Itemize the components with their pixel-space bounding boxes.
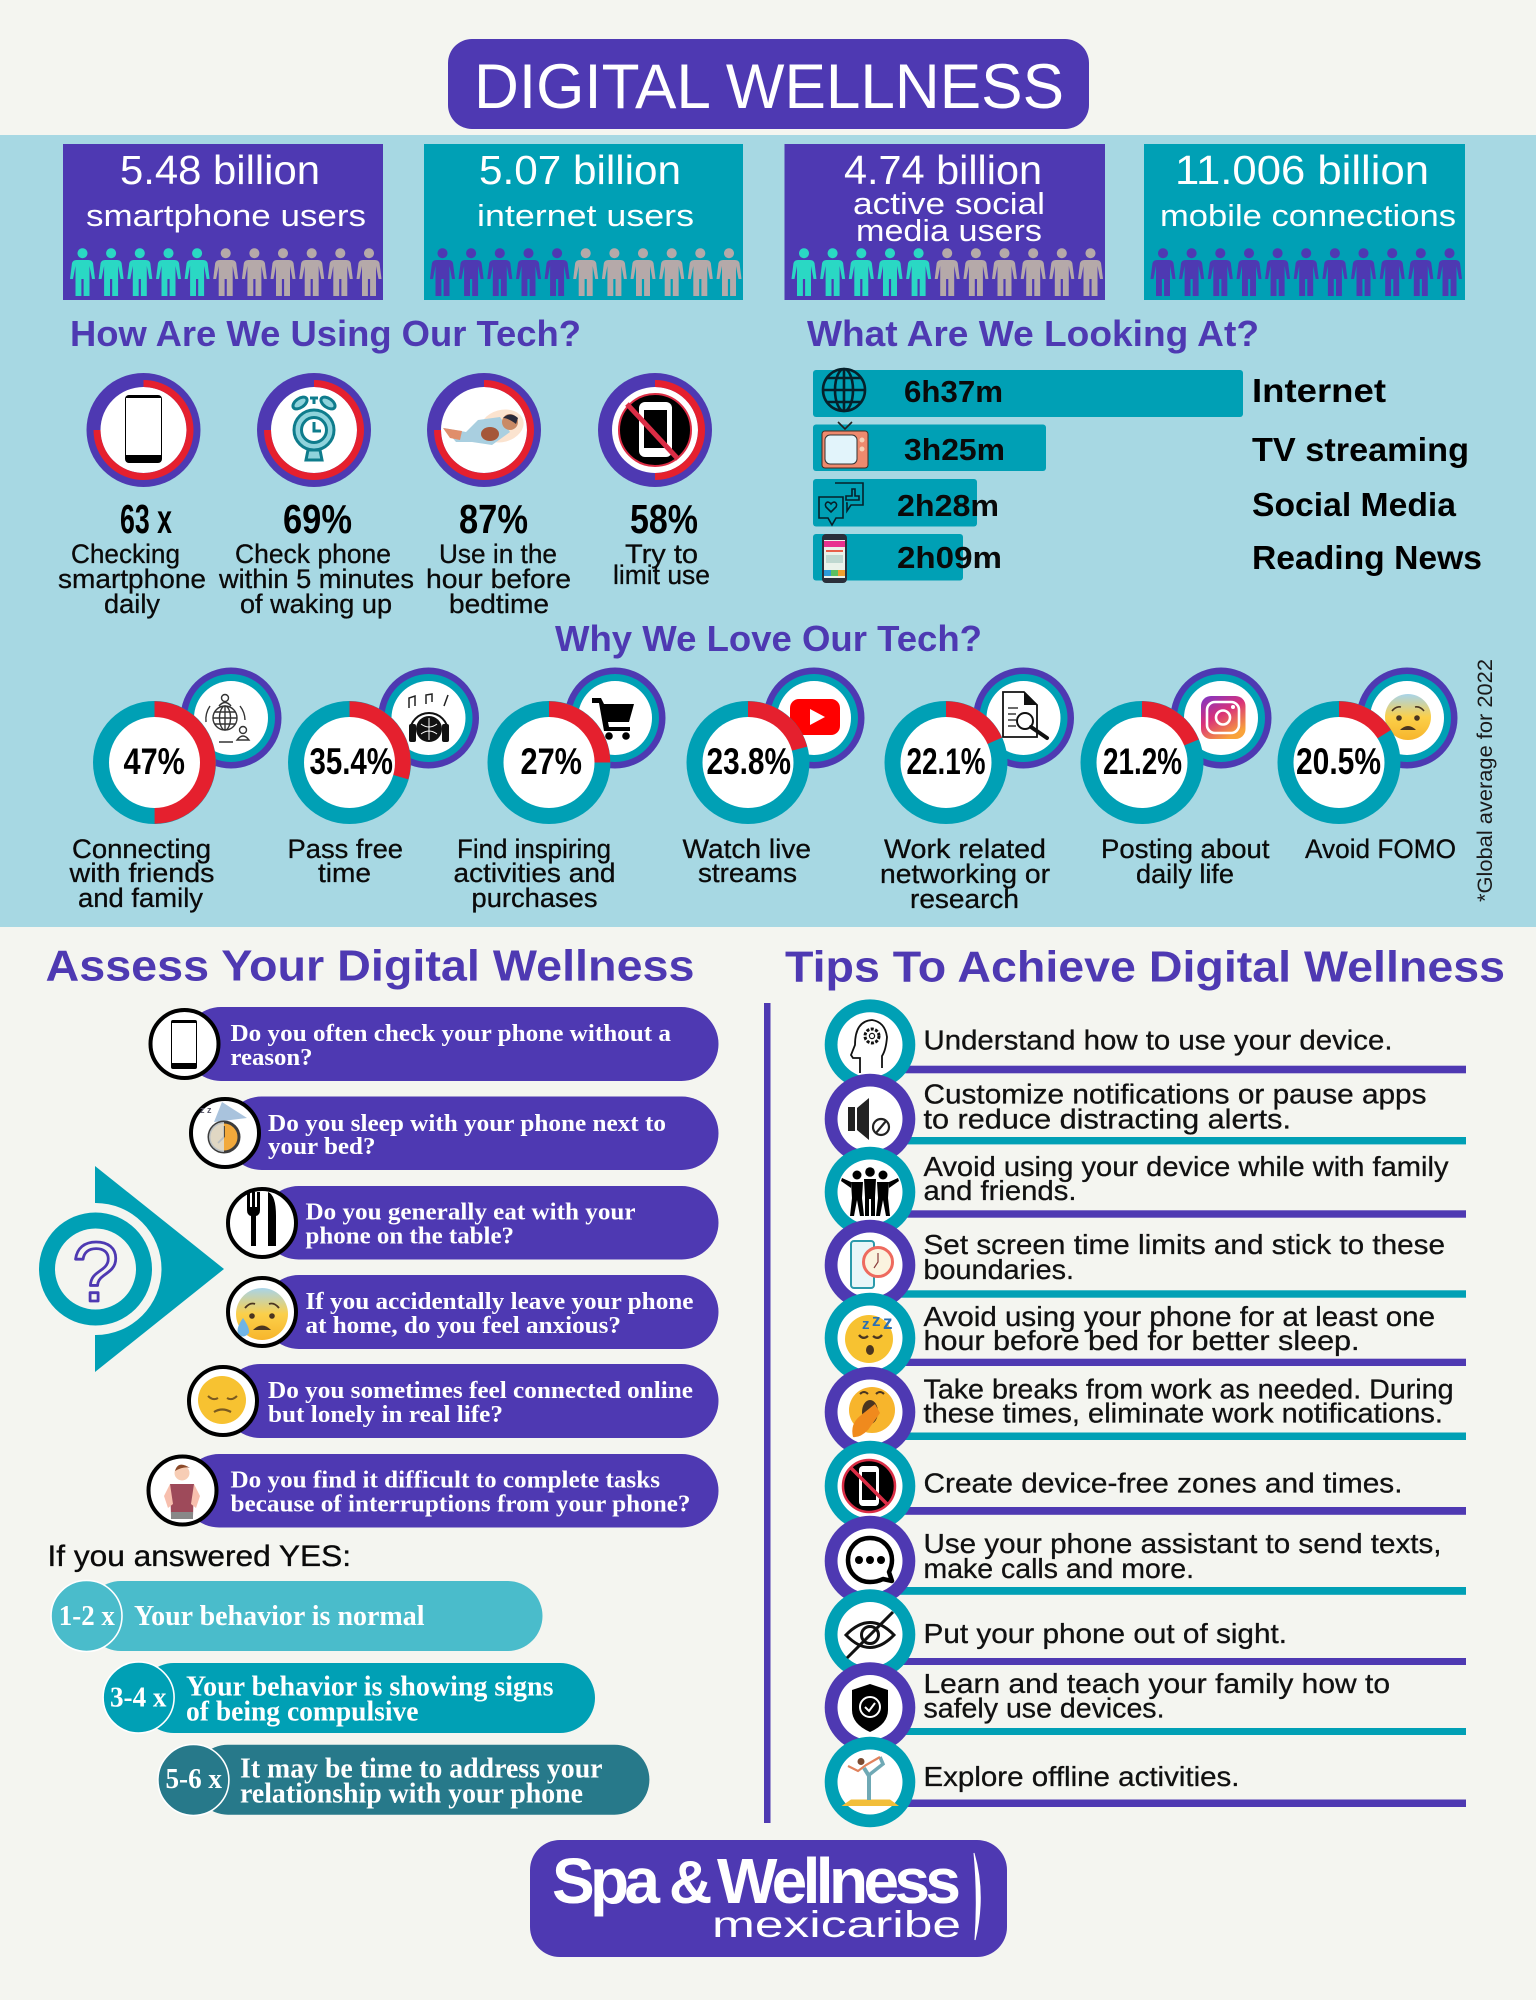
stat: use before bedtime: Use in the [439, 539, 557, 569]
stat: watch live streams: streams [698, 858, 797, 888]
panel: question 6: because of interruptions from your phone? [230, 1490, 690, 1518]
panel: question 5: Do you sometimes feel connected online [268, 1377, 693, 1404]
logo: spa and wellness mexicaribe: mexicaribe [712, 1904, 961, 1945]
stat: watch live streams: Watch live [682, 834, 811, 864]
tip 8: use phone assistant: make calls and more. [924, 1553, 1194, 1584]
stat: check phone after waking: 69% [283, 496, 352, 542]
stat: connecting with friends: and family [78, 883, 204, 913]
stat: pass free time: 35.4% [310, 741, 393, 782]
stat: checking smartphone daily: daily [104, 589, 161, 619]
stat: work related networking: research [910, 884, 1019, 914]
tip 9: phone out of sight [825, 1589, 1466, 1680]
title: DIGITAL WELLNESS [474, 52, 1064, 122]
panel: internet users stat: 5.07 billion [479, 147, 681, 193]
tip 3: avoid device with family: Avoid using your device while with family [924, 1151, 1449, 1182]
panel: internet users stat [424, 144, 743, 300]
logo: spa and wellness mexicaribe: Spa [552, 1845, 660, 1917]
footnote: global average: *Global average for 2022 [1474, 659, 1497, 902]
stat: use before bedtime: hour before [426, 564, 571, 594]
panel: mobile connections stat: mobile connections [1160, 198, 1456, 233]
tip 1: understand your device: Understand how to use your device. [924, 1024, 1392, 1055]
stat: work related networking: 22.1% [906, 741, 986, 782]
panel: mobile connections stat [1144, 144, 1465, 300]
icon: question mark arrow: ? [72, 1225, 119, 1319]
stat: work related networking: Work related [884, 834, 1046, 864]
tip 7: device-free zones: Create device-free zones and times. [924, 1468, 1402, 1499]
heading: how are we using our tech: How Are We Using Our Tech? [70, 313, 581, 354]
bar chart: daily time by activity [813, 369, 1482, 583]
tip 4: set screen time limits: boundaries. [924, 1254, 1074, 1285]
tip 5: avoid phone before bed: hour before bed for better sleep. [924, 1325, 1360, 1356]
stat: check phone after waking: Check phone [235, 539, 391, 569]
stat: avoid fomo [1278, 668, 1458, 864]
tip 11: explore offline activities [825, 1737, 1466, 1827]
panel: internet users stat: internet users [477, 198, 694, 233]
panel: active social media users stat: 4.74 billion [844, 147, 1042, 193]
stat: find inspiring activities: purchases [472, 883, 598, 913]
tip 4: set screen time limits [825, 1220, 1466, 1310]
result: 1-2 times: 1-2 x [59, 1601, 115, 1632]
bar: internet [813, 369, 1386, 417]
panel: question 4: at home, do you feel anxious? [306, 1312, 621, 1339]
stat: watch live streams [682, 668, 864, 888]
tip 1: understand your device [825, 999, 1466, 1090]
stat: work related networking: networking or [880, 859, 1050, 889]
bar: tv streaming: TV streaming [1252, 431, 1469, 468]
bar: internet: Internet [1252, 372, 1386, 409]
stat: posting about daily life: daily life [1136, 859, 1234, 889]
stat: try to limit use [598, 373, 712, 590]
panel: question 5 [189, 1364, 718, 1438]
bar: reading news: Reading News [1252, 539, 1482, 576]
icon: question mark arrow [30, 1166, 224, 1372]
panel: question 3: phone on the table? [306, 1222, 514, 1250]
stat: posting about daily life: Posting about [1101, 834, 1270, 864]
panel: question 4: If you accidentally leave your phone [306, 1288, 694, 1315]
heading: what are we looking at: What Are We Looking At? [807, 313, 1259, 354]
result: 3-4 times: of being compulsive [186, 1696, 418, 1728]
panel: question 4 [228, 1275, 718, 1349]
panel: active social media users stat: media users [856, 213, 1042, 248]
stat: watch live streams: 23.8% [706, 741, 791, 782]
panel: question 6 [148, 1454, 718, 1528]
panel: smartphone users stat: 5.48 billion [120, 147, 320, 193]
stat: use before bedtime: 87% [459, 496, 528, 542]
stat: try to limit use: limit use [613, 560, 710, 590]
heading: tips to achieve digital wellness: Tips To Achieve Digital Wellness [785, 942, 1505, 992]
tip 3: avoid device with family [825, 1147, 1466, 1237]
tip 8: use phone assistant: Use your phone assistant to send texts, [924, 1528, 1442, 1559]
tip 6: take breaks from work [825, 1367, 1466, 1457]
result: 5-6 times: 5-6 x [166, 1764, 222, 1795]
stat: connecting with friends: with friends [68, 858, 215, 888]
result: 3-4 times: Your behavior is showing signs [186, 1672, 554, 1702]
result: 3-4 times: 3-4 x [110, 1682, 166, 1714]
stat: connecting with friends: Connecting [72, 834, 211, 864]
tip 3: avoid device with family: and friends. [924, 1175, 1076, 1206]
stat: connecting with friends [68, 668, 282, 913]
stat: connecting with friends: 47% [124, 741, 185, 782]
panel: active social media users stat: active social [853, 186, 1045, 221]
result: 5-6 times: It may be time to address your [240, 1754, 602, 1784]
result: 1-2 times: Your behavior is normal [134, 1601, 425, 1632]
panel: question 2 [191, 1096, 718, 1170]
bar: tv streaming [813, 422, 1469, 471]
panel: question 1: Do you often check your phone without a [230, 1020, 671, 1047]
stat: avoid fomo: Avoid FOMO [1305, 834, 1456, 864]
tip 6: take breaks from work: these times, eliminate work notifications. [924, 1397, 1443, 1428]
panel: question 3: Do you generally eat with your [306, 1198, 636, 1226]
heading: why we love our tech: Why We Love Our Tech? [555, 618, 982, 659]
logo: spa and wellness mexicaribe: & [669, 1849, 712, 1916]
bar: social media [813, 479, 1457, 526]
bar: reading news: 2h09m [897, 540, 1002, 575]
tip 2: customize notifications [825, 1074, 1466, 1164]
tip 6: take breaks from work: Take breaks from work as needed. During [924, 1373, 1454, 1404]
stat: checking smartphone daily: smartphone [58, 564, 206, 594]
tip 10: teach safe use: safely use devices. [924, 1693, 1164, 1724]
bar: tv streaming: 3h25m [904, 432, 1005, 467]
panel: question 2: z z [200, 1105, 212, 1115]
stat: posting about daily life: 21.2% [1103, 741, 1182, 782]
stat: find inspiring activities [454, 668, 666, 913]
stat: use before bedtime [426, 373, 571, 619]
tip 10: teach safe use [825, 1662, 1466, 1753]
result: 5-6 times: relationship with your phone [240, 1778, 583, 1810]
bar: social media: Social Media [1252, 486, 1457, 523]
result: 3-4 times [103, 1662, 595, 1733]
text: if you answered yes: If you answered YES: [48, 1540, 351, 1573]
divider between assess and tips columns [764, 1003, 770, 1823]
panel: question 6: Do you find it difficult to complete tasks [230, 1466, 660, 1494]
panel: question 1: reason? [230, 1044, 312, 1071]
stat: checking smartphone daily [58, 373, 206, 619]
tip 5: avoid phone before bed: z [883, 1313, 892, 1334]
stat: check phone after waking: of waking up [240, 589, 392, 619]
stat: use before bedtime: bedtime [449, 589, 549, 619]
stat: try to limit use: Try to [625, 539, 698, 569]
tip 5: avoid phone before bed: z [872, 1311, 880, 1330]
stat: pass free time [288, 668, 479, 888]
bar: reading news [813, 534, 1482, 583]
result: 5-6 times [158, 1744, 649, 1816]
panel: smartphone users stat [63, 144, 383, 300]
tip 4: set screen time limits: Set screen time limits and stick to these [924, 1229, 1445, 1260]
tip 9: phone out of sight: Put your phone out of sight. [924, 1618, 1287, 1649]
stat: find inspiring activities: Find inspiring [457, 834, 611, 864]
logo: spa and wellness mexicaribe: Wellness [717, 1845, 961, 1917]
panel: active social media users stat [784, 144, 1105, 300]
stat: work related networking [880, 668, 1074, 914]
stat: try to limit use: 58% [630, 496, 698, 542]
panel: question 1 [150, 1007, 718, 1081]
heading: assess your digital wellness: Assess Your Digital Wellness [46, 942, 694, 990]
stat: checking smartphone daily: Checking [71, 539, 180, 569]
panel: question 5: but lonely in real life? [268, 1401, 503, 1428]
tip 11: explore offline activities: Explore offline activities. [924, 1761, 1240, 1792]
result: 1-2 times [51, 1580, 542, 1652]
logo: spa and wellness mexicaribe [530, 1840, 1007, 1957]
bar: internet: 6h37m [904, 374, 1003, 409]
bar: social media: 2h28m [897, 488, 999, 523]
stat: check phone after waking [218, 373, 414, 619]
tip 5: avoid phone before bed: z [862, 1316, 870, 1333]
tip 2: customize notifications: to reduce distracting alerts. [924, 1103, 1291, 1134]
tip 10: teach safe use: Learn and teach your family how to [924, 1668, 1390, 1699]
panel: mobile connections stat: 11.006 billion [1175, 147, 1429, 193]
stat: find inspiring activities: activities and [454, 858, 616, 888]
stat: posting about daily life [1080, 668, 1272, 889]
panel: question 2: Do you sleep with your phone next to [268, 1110, 666, 1137]
stat: checking smartphone daily: 63 x [120, 496, 172, 542]
tip 7: device-free zones [825, 1441, 1466, 1531]
tip 5: avoid phone before bed: Avoid using your phone for at least one [924, 1301, 1435, 1332]
tip 8: use phone assistant [825, 1516, 1466, 1606]
stat: find inspiring activities: 27% [520, 741, 582, 782]
tip 5: avoid phone before bed [825, 1293, 1466, 1383]
stat: check phone after waking: within 5 minutes [218, 564, 414, 594]
panel: question 3 [228, 1186, 718, 1260]
stat: pass free time: time [318, 858, 371, 888]
panel: smartphone users stat: smartphone users [86, 198, 366, 233]
stat: pass free time: Pass free [288, 834, 403, 864]
stat: avoid fomo: 20.5% [1296, 741, 1381, 782]
tip 2: customize notifications: Customize notifications or pause apps [924, 1078, 1426, 1109]
panel: question 2: your bed? [268, 1133, 376, 1160]
